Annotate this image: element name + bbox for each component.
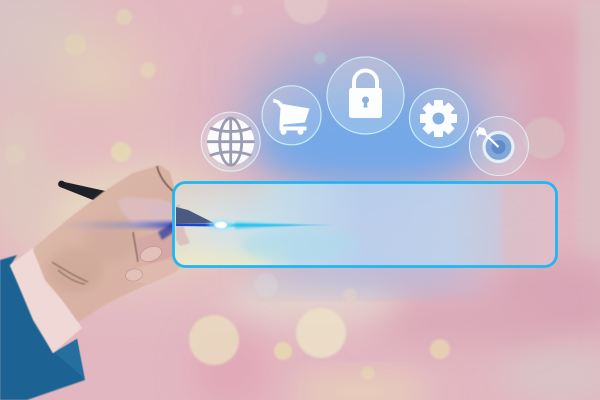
knuckle shadow <box>157 166 174 192</box>
icon: gear <box>410 88 468 148</box>
icon: shopping cart <box>262 86 321 145</box>
wrist shading <box>47 248 103 292</box>
thumbnail <box>149 200 173 220</box>
blue beam across hand <box>60 222 175 240</box>
middle finger <box>136 226 192 264</box>
thumb <box>117 197 177 226</box>
icon: target with arrow <box>470 116 528 176</box>
hand body <box>33 165 190 322</box>
icon: globe <box>201 112 260 171</box>
pen tip <box>176 207 214 224</box>
back-of-hand shading <box>84 218 136 262</box>
fingernails <box>125 244 164 282</box>
ring finger <box>126 258 184 284</box>
light streak from pen tip <box>176 220 335 230</box>
fingertips inside box <box>176 204 190 246</box>
icon: padlock <box>327 57 404 134</box>
glowing rounded box <box>174 182 556 266</box>
palm creases <box>52 262 88 284</box>
suit sleeve <box>0 255 85 400</box>
pen <box>58 181 128 201</box>
sleeve cuff fold <box>55 339 84 378</box>
shirt cuff <box>10 248 82 353</box>
hand holding pen <box>0 165 192 400</box>
